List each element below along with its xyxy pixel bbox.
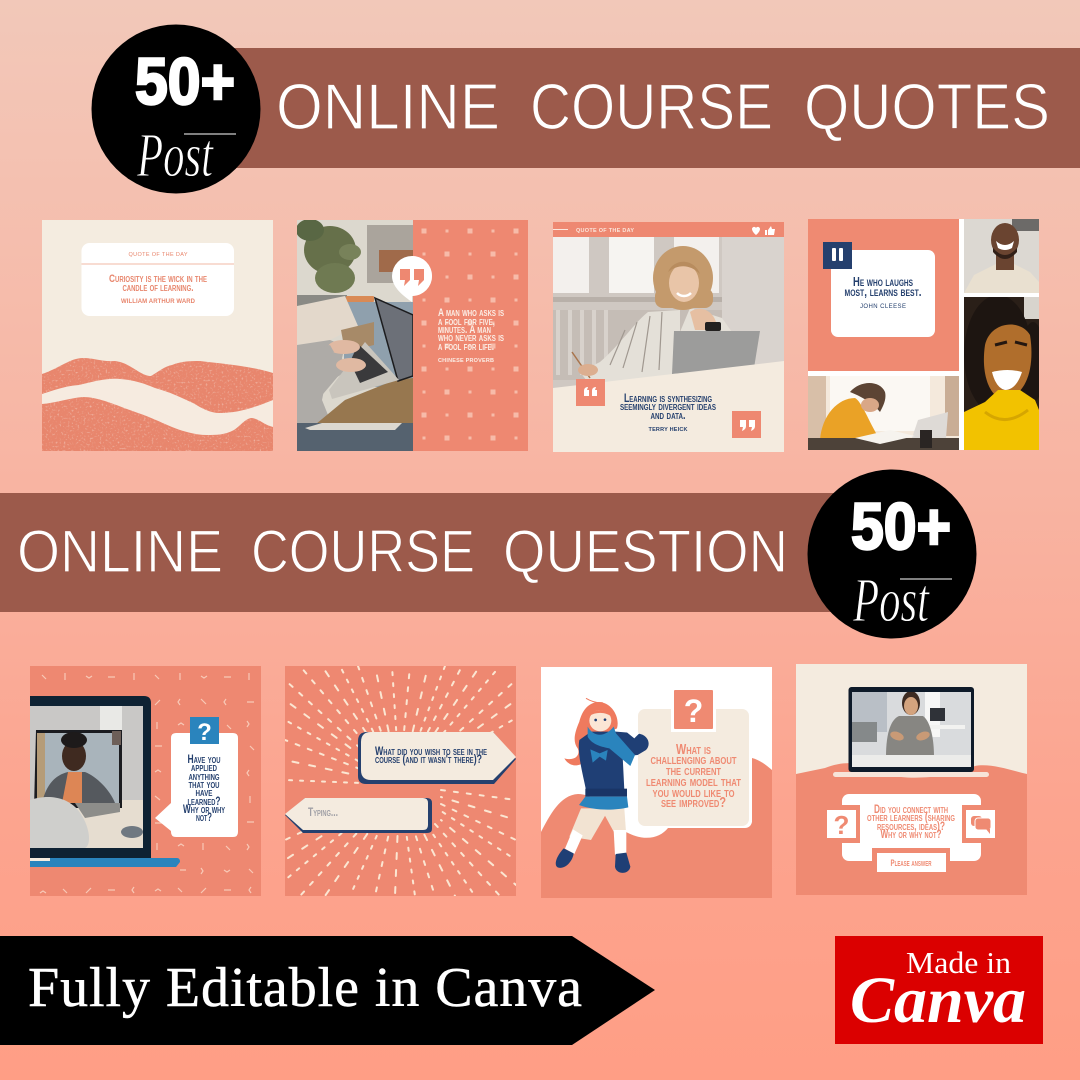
panel: question cartoon girl	[541, 667, 772, 898]
question card: Did you connect with	[874, 804, 948, 816]
speech bubble	[155, 717, 238, 837]
badge: 50+ post middle: Post	[852, 567, 930, 635]
icon: question square: ?	[197, 719, 212, 746]
quote card: He who laughs	[853, 274, 913, 289]
question card	[634, 690, 752, 828]
icon: chat box	[962, 805, 1000, 843]
chat bubble: question: What did you wish to see in the	[375, 744, 487, 758]
radial dash pattern	[285, 666, 516, 896]
photo: smiling woman with laptop	[553, 237, 784, 397]
question card: Please answer	[890, 858, 932, 869]
quote text: who never asks is	[438, 332, 505, 344]
heading: online course question	[17, 518, 788, 585]
quote card: Curiosity is the wick in the	[109, 273, 207, 285]
chat bubble: question	[358, 732, 516, 784]
speech bubble: not?	[196, 812, 212, 824]
badge: 50+ post middle: 50+	[851, 489, 951, 563]
question card: resources, ideas)?	[877, 821, 945, 833]
icon: question box	[822, 805, 860, 843]
arrow banner: fully editable in canva: Fully Editable in Canva	[28, 957, 582, 1019]
photo: laughing woman yellow sweater	[964, 295, 1045, 450]
icon: pause square	[823, 242, 852, 269]
chat bubble: typing: Typing...	[308, 805, 338, 819]
heading: online course question: COURSE	[251, 518, 475, 585]
icon: close quote	[732, 411, 761, 438]
panel: question video call learners	[796, 664, 1027, 895]
speech bubble: Have you	[188, 754, 221, 766]
question card	[822, 794, 1000, 872]
heading: online course quotes: ONLINE	[276, 70, 500, 143]
heading: online course question: ONLINE	[17, 518, 223, 585]
question card: other learners (sharing	[867, 812, 955, 824]
heading: online course quotes: COURSE	[530, 70, 773, 143]
speech bubble: learned?	[188, 796, 220, 808]
banner: online course question	[0, 493, 840, 612]
panel: quote a man who asks	[296, 219, 528, 451]
badge: 50+ post top	[92, 24, 260, 194]
quote text: TERRY HEICK	[648, 427, 688, 433]
panel: quote he who laughs collage	[808, 219, 1045, 450]
icon: quote bubble	[392, 256, 432, 302]
icon: heart and thumb	[752, 226, 775, 235]
photo: girl writing at desk	[808, 376, 959, 450]
panel: question laptop video call	[30, 666, 261, 896]
quote card	[82, 243, 234, 316]
quote card: JOHN CLEESE	[860, 304, 906, 310]
cream diagonal	[553, 361, 784, 452]
panel: quote learning is synthesizing	[553, 222, 784, 452]
icon: question box: ?	[834, 810, 849, 840]
quote card: QUOTE OF THE DAY	[128, 252, 188, 258]
quote card: candle of learning.	[122, 282, 194, 294]
badge: 50+ post top: Post	[136, 122, 214, 190]
banner: online course quotes	[225, 48, 1080, 168]
quote text: A man who asks is	[438, 307, 504, 319]
quote text	[620, 393, 717, 433]
question card: What is	[676, 742, 711, 758]
laptop with woman on screen	[833, 687, 989, 777]
chat bubble: typing	[285, 798, 432, 833]
mountains illustration	[42, 358, 273, 451]
badge: made in canva	[835, 936, 1043, 1044]
speech bubble: have	[196, 787, 213, 799]
chat bubble: question: course (and it wasn't there)?	[375, 752, 482, 766]
quote card: WILLIAM ARTHUR WARD	[121, 299, 196, 305]
quote text: CHINESE PROVERB	[438, 358, 494, 364]
quote text: seemingly divergent ideas	[620, 401, 717, 413]
quote text: and data.	[650, 410, 686, 422]
quote text: Learning is synthesizing	[624, 393, 712, 405]
illustration: girl in school uniform	[556, 698, 649, 873]
coral waves	[541, 758, 772, 898]
question card: learning model that	[646, 774, 741, 790]
question card: challenging about	[650, 752, 736, 768]
badge: 50+ post middle	[808, 470, 976, 638]
heading: online course quotes: QUOTES	[804, 70, 1050, 143]
icon: open quote	[576, 379, 605, 406]
quote text: a fool for five,	[438, 316, 495, 328]
photo: person typing on laptop	[296, 219, 413, 451]
quote card	[823, 242, 935, 337]
speech bubble: that you	[188, 779, 220, 791]
panel: quote curiosity	[42, 220, 273, 451]
heading: online course question: QUESTION	[503, 518, 788, 585]
badge: made in canva: Canva	[850, 964, 1026, 1037]
panel: question radial dashes	[285, 666, 516, 896]
panel: quote learning is synthesizing: QUOTE OF THE DAY	[576, 228, 634, 234]
question card: see improved?	[661, 795, 726, 811]
quote text: minutes. A man	[438, 324, 491, 336]
speech bubble: applied	[191, 762, 217, 774]
speech bubble: Why or why	[183, 804, 225, 816]
beige top with wave	[796, 664, 1027, 778]
heading: online course quotes	[276, 70, 1050, 143]
badge: 50+ post top: 50+	[135, 44, 235, 118]
quote card: most, learns best.	[844, 284, 922, 299]
badge: made in canva: Made in	[906, 945, 1012, 980]
photo: laughing man	[964, 219, 1039, 293]
question card: Why or why not?	[880, 829, 942, 841]
quote text: a fool for life.	[438, 341, 494, 353]
laptop with video call	[30, 696, 180, 867]
question card: you would like to	[652, 785, 735, 801]
arrow banner: fully editable in canva	[0, 936, 655, 1045]
quote text	[438, 307, 505, 364]
question card: the current	[666, 763, 721, 779]
question card: ?	[684, 693, 703, 729]
speech bubble: anything	[188, 771, 220, 783]
